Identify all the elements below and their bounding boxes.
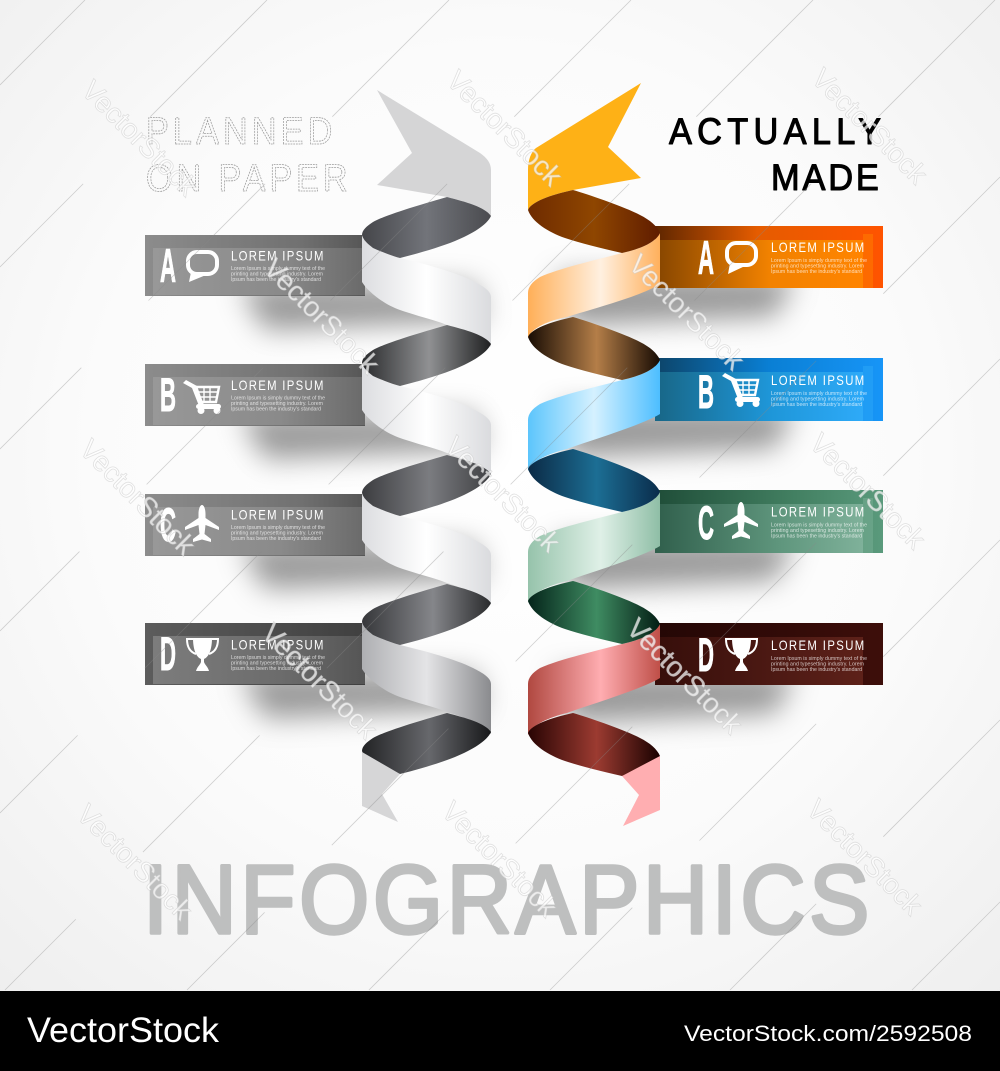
bar: planned C [145,494,365,556]
bar: planned B [145,364,365,426]
watermark text: VectorStock [256,617,384,746]
watermark text: VectorStock [623,248,751,377]
bar: planned A [145,235,365,296]
bar: actual D maroon: Ipsum has been the industry's standard [771,667,862,673]
footer bar: VectorStock.com/2592508 [684,1021,972,1046]
bar: planned C: Lorem Ipsum is simply dummy text of the [231,525,325,531]
watermark text: VectorStock [621,612,749,741]
bar: actual D maroon: LOREM IPSUM [771,638,864,653]
heading: infographics: INFOGRAPHICS [143,845,869,954]
bar: actual D maroon: Lorem Ipsum is simply dummy text of the [771,656,867,662]
ribbon: grey helix [362,90,491,822]
icon: cart [183,380,221,414]
watermark text: VectorStock [801,793,929,922]
bar: planned A: printing and typesetting industry. Lorem [231,272,323,278]
bar: actual C green [655,490,883,553]
panel: actual bars [655,226,883,685]
ribbon: colour helix [528,83,660,826]
heading: planned on paper [146,109,348,199]
bar: planned D: Ipsum has been the industry's standard [231,666,321,672]
icon: plane [185,505,219,542]
watermark text: VectorStock [74,433,202,562]
bar: actual B blue [655,358,883,421]
bar: planned A: LOREM IPSUM [231,249,323,264]
bar: actual D maroon [655,623,883,685]
bar: planned C: LOREM IPSUM [231,508,323,523]
bar: actual B blue: Lorem Ipsum is simply dummy text of the [771,391,867,397]
heading: planned on paper: PLANNED [146,109,332,152]
bar: planned C: C [160,498,176,551]
flag: grey ribbon top [377,90,491,216]
bar: planned A: Lorem Ipsum is simply dummy text of the [231,266,325,272]
bar: actual A orange: printing and typesetting industry. Lorem [771,264,864,270]
bar: planned B: Ipsum has been the industry's standard [231,406,321,412]
tail: grey ribbon end [362,752,400,822]
bar: planned D: LOREM IPSUM [231,638,323,653]
watermark text: VectorStock [258,252,386,381]
bar: actual B blue: B [698,365,714,418]
bar: actual D maroon: D [698,628,714,681]
icon: speech bubble [727,243,756,274]
bar: actual A orange: Lorem Ipsum is simply dummy text of the [771,258,867,264]
watermark text: VectorStock [804,427,932,556]
bar: actual A orange: A [698,231,714,284]
watermark text [71,62,934,927]
bar: actual A orange: LOREM IPSUM [771,240,864,255]
bar: actual C green: printing and typesetting industry. Lorem [771,528,864,534]
footer bar: VectorStock [27,1011,220,1050]
bar: planned A: Ipsum has been the industry's standard [231,277,321,283]
watermark text: VectorStock [436,795,564,924]
icon: speech bubble [188,252,217,282]
bar: planned B: printing and typesetting industry. Lorem [231,401,323,407]
flag: orange ribbon top [528,83,641,210]
watermark text: VectorStock [76,74,204,203]
bar: actual C green: LOREM IPSUM [771,505,864,520]
panel: planned bars [145,235,365,685]
bar: actual A orange [655,226,883,288]
bar: planned D: Lorem Ipsum is simply dummy text of the [231,655,325,661]
bar: actual C green: Ipsum has been the industry's standard [771,534,862,540]
bar: actual A orange: Ipsum has been the industry's standard [771,269,862,275]
bar: planned D [145,623,365,685]
watermark text: VectorStock [439,430,567,559]
bar: planned C: printing and typesetting industry. Lorem [231,530,323,536]
icon: cart [722,373,760,407]
watermark text: VectorStock [806,62,934,191]
watermark text: VectorStock [71,798,199,927]
heading: planned on paper: ON PAPER [146,156,348,199]
heading: actually made: MADE [771,157,879,198]
heading: actually made: ACTUALLY [669,111,881,152]
bar: actual B blue: printing and typesetting industry. Lorem [771,396,864,402]
bar: actual C green: C [698,496,714,549]
bar: actual D maroon: printing and typesetting industry. Lorem [771,662,864,668]
bar: planned D: D [160,627,176,680]
bar: actual B blue: Ipsum has been the industry's standard [771,402,862,408]
icon: plane [724,502,758,539]
bar: planned C: Ipsum has been the industry's standard [231,536,321,542]
heading: actually made [669,111,881,198]
bar: actual B blue: LOREM IPSUM [771,373,864,388]
bar: planned D: printing and typesetting industry. Lorem [231,660,323,666]
bar: actual C green: Lorem Ipsum is simply dummy text of the [771,522,867,528]
bar: planned B: LOREM IPSUM [231,378,323,393]
bar: planned B: Lorem Ipsum is simply dummy text of the [231,396,325,402]
icon: trophy [726,638,757,671]
bar: planned B: B [160,368,176,421]
footer bar [0,991,1000,1071]
watermark text: VectorStock [441,64,569,193]
icon: trophy [187,638,218,671]
bar: planned A: A [160,239,176,292]
bar drop shadows [240,276,795,723]
tail: pink ribbon end [622,756,660,826]
